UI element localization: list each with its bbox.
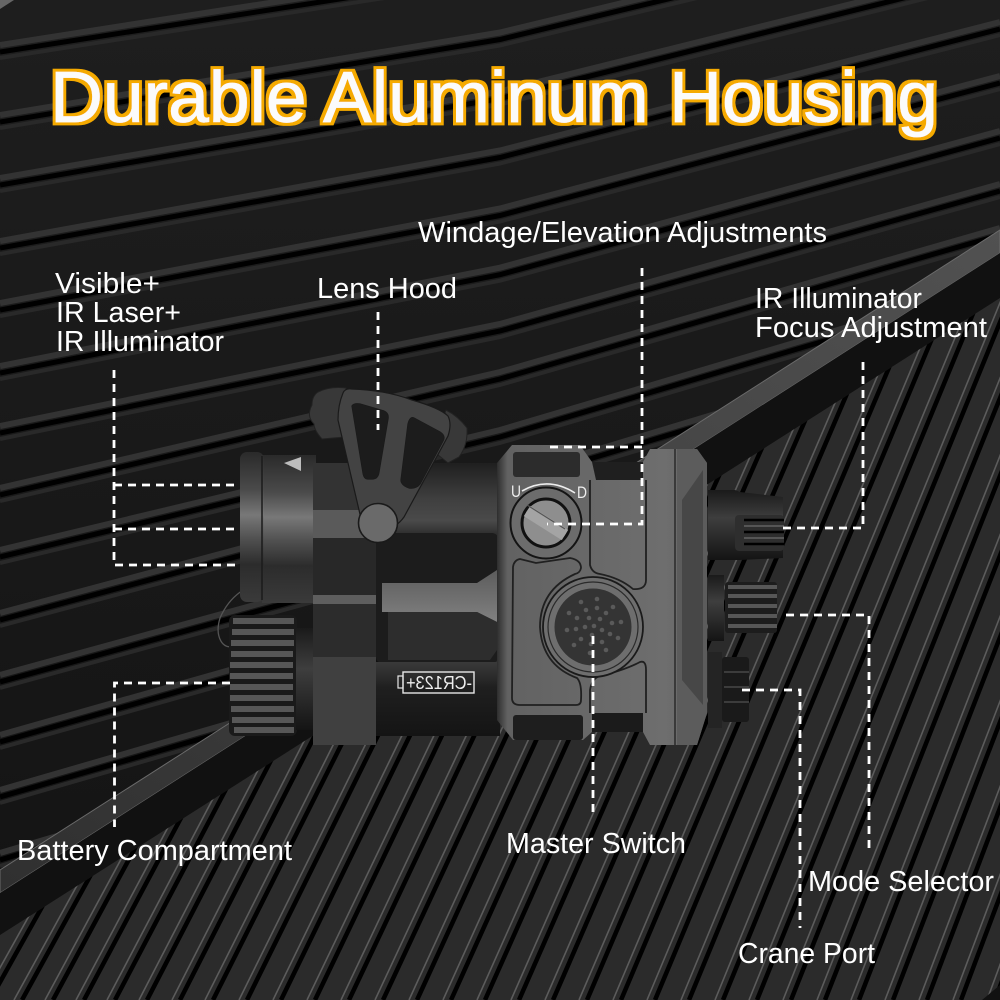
lanyard wire — [218, 582, 308, 647]
label: Lens Hood: Lens Hood — [317, 273, 457, 305]
battery tube — [376, 662, 500, 736]
label: Master Switch: Master Switch — [506, 828, 686, 860]
U and D markings: D — [577, 483, 587, 502]
label: IR Illuminator Focus Adjustment — [755, 283, 987, 344]
alignment triangle mark — [284, 457, 301, 471]
recessed centre panel — [376, 533, 498, 663]
focus knob — [708, 490, 784, 560]
label: Visible + IR Laser + IR Illuminator: IR Laser+ — [56, 297, 181, 329]
upper tube — [313, 463, 500, 538]
leader: Lens Hood — [377, 312, 379, 430]
leader: Visible + IR Laser + IR Illuminator — [114, 370, 240, 565]
leader: Battery Compartment — [114, 683, 230, 827]
battery cap knurled knob — [229, 615, 314, 736]
label: Battery Compartment: Battery Compartment — [17, 835, 292, 867]
left lower body — [313, 538, 376, 745]
label: Mode Selector: Mode Selector — [808, 866, 995, 898]
lens hood arm — [338, 389, 450, 542]
lower left pocket — [512, 558, 581, 705]
label: Visible + IR Laser + IR Illuminator — [55, 268, 225, 358]
right plate section — [677, 449, 707, 745]
label: Visible + IR Laser + IR Illuminator: Visible+ — [55, 268, 160, 300]
adjustment screw — [510, 488, 582, 558]
U and D markings: U — [511, 482, 521, 501]
mode selector knob — [708, 652, 749, 728]
leader: IR Illuminator Focus Adjustment — [783, 362, 863, 528]
label: Crane Port: Crane Port — [738, 938, 875, 970]
lens hood back — [309, 388, 467, 463]
label: IR Illuminator Focus Adjustment: Focus Adjustment — [755, 312, 987, 344]
label: Windage/Elevation Adjustments: Windage/Elevation Adjustments — [418, 217, 827, 249]
middle knob — [708, 575, 777, 641]
leader: Master Switch — [592, 636, 594, 817]
master switch button — [543, 577, 643, 677]
top slots — [513, 452, 580, 477]
label: IR Illuminator Focus Adjustment: IR Illuminator — [755, 283, 922, 315]
upper right pocket — [590, 480, 646, 589]
leader: Crane Port — [742, 690, 800, 928]
leader: Windage/Elevation Adjustments — [547, 268, 642, 524]
title: Durable Aluminum Housing — [50, 58, 938, 138]
control plate — [338, 389, 707, 745]
bottom slots — [513, 715, 583, 740]
battery label CR123: -CR123+ — [406, 673, 472, 693]
U and D markings — [511, 482, 587, 502]
label: Visible + IR Laser + IR Illuminator: IR Illuminator — [56, 326, 225, 358]
eyepiece cap — [240, 452, 316, 603]
lower right pocket — [590, 662, 646, 713]
leader: Mode Selector — [786, 615, 869, 853]
right side knobs — [708, 490, 784, 728]
